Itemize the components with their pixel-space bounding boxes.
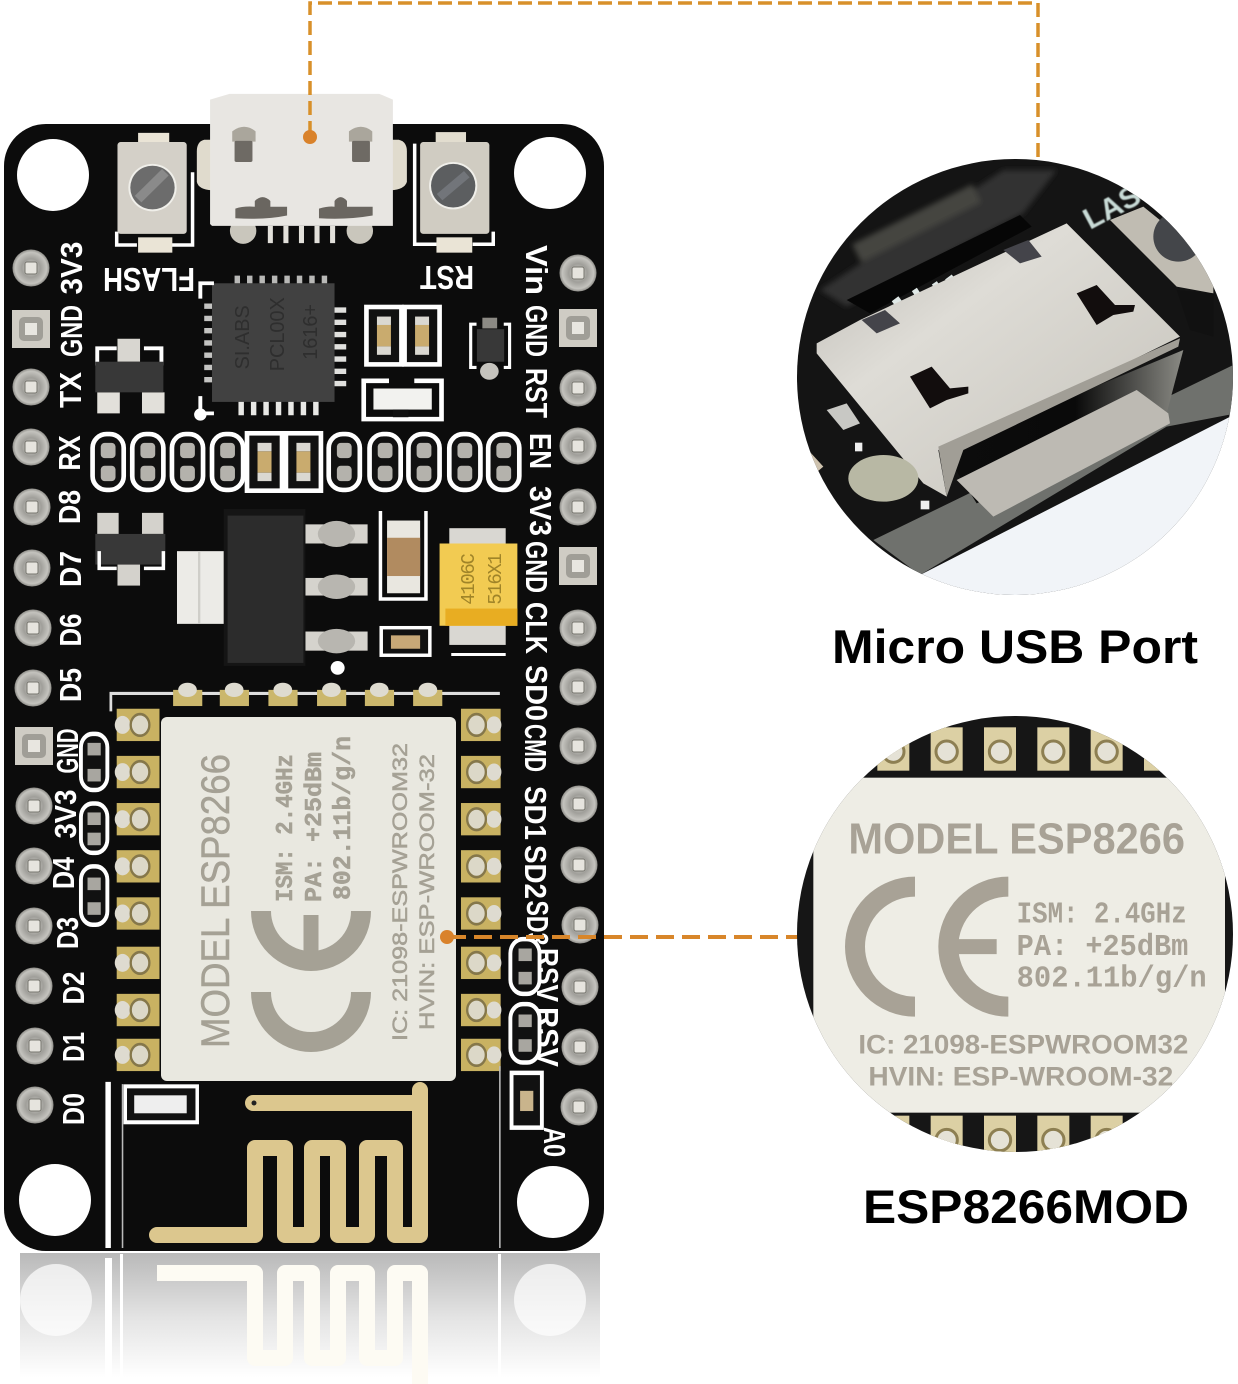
module silkscreen and pads [81,683,542,1248]
zoomed label text: IC: 21098-ESPWROOM32 [858,1029,1188,1059]
right pin labels: SD3 [520,900,555,946]
label text: MODEL ESP8266 [194,754,238,1048]
left pin labels: D8 [52,490,87,524]
right push button [1110,207,1213,293]
small resistor near regulator [381,628,506,655]
right pin labels: GND [519,305,554,357]
right pin labels: GND [519,541,554,593]
label text: IC: 21098-ESPWROOM32 [389,743,412,1041]
usb interface chip [194,276,346,421]
left pin labels: D1 [56,1032,91,1062]
mounting holes [17,137,589,1238]
left pin labels: GND [50,728,85,774]
left pin labels: D7 [53,551,88,587]
zoomed label text: ISM: 2.4GHz [1017,898,1187,933]
heading: esp8266mod: ESP8266MOD [863,1180,1189,1233]
small resistors and LED [364,307,510,419]
esp8266 module [81,683,542,1248]
button labels: FLASH [103,261,195,298]
right pin labels: EN [523,433,558,469]
button labels: RST [420,259,474,296]
zoomed label text [848,814,1207,1091]
left pin labels: RX [52,435,87,470]
label surface [813,778,1225,1113]
right pin labels: SD2 [518,845,553,899]
shielding can label [161,717,456,1081]
upper board components [93,94,519,675]
micro usb connector [197,94,407,244]
right pin labels: A0 [537,1127,572,1157]
right pin labels [518,245,572,1157]
usb interface chip: PCL00X [267,297,289,371]
left pin labels: D4 [46,856,81,889]
connector mouth [943,350,1183,503]
usb interface chip: SI.ABS [232,305,254,369]
tantalum capacitor: 4106C [458,553,480,605]
board edge [873,363,1237,575]
zoomed CE mark [855,887,1008,1007]
right pin labels: RSV [530,948,565,1002]
voltage regulator [177,509,368,675]
left pin labels: GND [54,305,89,357]
left pin labels: D2 [56,972,91,1004]
CE mark on module [261,911,361,1042]
left pin labels: TX [53,372,88,408]
black component edge [847,215,1032,313]
left pin labels: 3V3 [54,242,89,294]
right pin labels: RSV [530,1007,565,1067]
blurred ic background [820,170,1057,307]
top pads [877,727,1176,771]
solder pad [848,455,918,502]
left pin labels: D5 [53,668,88,702]
label text [194,736,439,1048]
connector tongue [957,390,1170,517]
right pin labels: CMD [518,724,553,772]
zoomed label text: HVIN: ESP-WROOM-32 [868,1061,1173,1091]
transistor lower [95,513,165,586]
right pin labels: RST [519,368,554,418]
row of pins [893,277,953,303]
right pin labels: CLK [519,602,554,654]
orange callout line: micro usb [303,3,1038,158]
flash button [117,133,193,253]
left pin labels [46,242,91,1125]
circuit board [4,94,604,1251]
light background below board [920,413,1237,598]
pcb antenna [157,1090,420,1235]
right pin labels: SD1 [518,786,553,840]
label text: 802.11b/g/n [329,736,358,900]
ceramic capacitor [380,511,426,599]
right pin labels: 3V3 [523,486,558,536]
left pin labels: D0 [56,1093,91,1125]
left pin labels: D3 [50,917,85,949]
orange callout line: esp8266 module [440,930,800,944]
reflection of board [20,1253,600,1384]
left pin labels: D6 [53,614,88,646]
right pin labels: SD0 [519,665,554,721]
label text: PA: +25dBm [302,752,329,902]
tantalum capacitor [440,528,517,645]
usb interface chip: 1616+ [300,304,322,360]
connector shell [817,223,1180,497]
left pin labels: 3V3 [48,790,83,838]
detail circle: esp8266 module [797,716,1233,1159]
white silk text: LAS [1078,179,1146,236]
zoomed label text: MODEL ESP8266 [848,814,1185,863]
label text: ISM: 2.4GHz [273,754,300,902]
row of passive components [93,433,519,491]
right pin labels: Vin [519,245,554,295]
transistor top [95,339,165,413]
button labels [103,259,474,298]
left header pins [12,250,54,1124]
tantalum capacitor: 516X1 [485,553,507,605]
right header pins [559,254,598,1126]
zoomed label text: 802.11b/g/n [1017,962,1207,997]
label text: HVIN: ESP-WROOM-32 [416,754,439,1030]
shell slots [910,367,968,408]
bottom pads [894,1116,1123,1152]
detail circle: micro usb port [790,159,1237,598]
reset button [415,132,493,253]
zoomed label text: PA: +25dBm [1017,930,1188,965]
heading: micro usb port: Micro USB Port [832,620,1198,673]
